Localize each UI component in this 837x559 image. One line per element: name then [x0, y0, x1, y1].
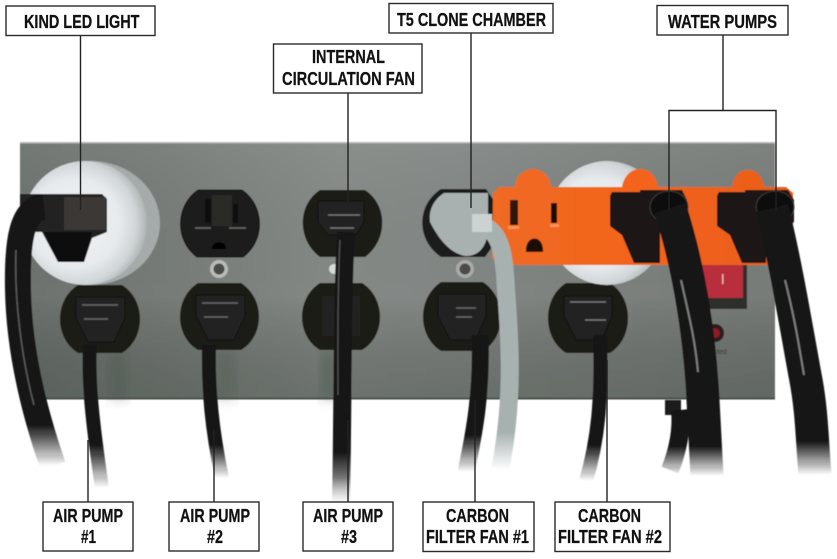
icon: LED light plug [20, 194, 107, 262]
label: INTERNAL CIRCULATION FAN: CIRCULATION FAN [282, 69, 415, 89]
label: T5 CLONE CHAMBER [389, 4, 553, 33]
label: WATER PUMPS [657, 6, 788, 35]
cable: grey T5 clone chamber [472, 223, 510, 470]
leader lines [80, 33, 776, 502]
cable: secondary cord behind water pump [665, 400, 681, 470]
cable: LED light [16, 207, 53, 466]
icon: T5 outlet and grey plug [422, 189, 497, 257]
cable: carbon filter fan 2 [586, 335, 600, 481]
label: INTERNAL CIRCULATION FAN [274, 44, 422, 93]
label: AIR PUMP #2: AIR PUMP [180, 506, 250, 526]
label: KIND LED LIGHT [6, 6, 155, 36]
label: AIR PUMP #2 [169, 502, 259, 551]
label: AIR PUMP #2: #2 [207, 527, 223, 547]
icon: right white round receptacle [547, 161, 667, 285]
icon: open outlet top row [181, 190, 259, 257]
label: AIR PUMP #1: #1 [81, 527, 96, 547]
panel: grey metal faceplate [20, 142, 775, 400]
cable: water pump 2 [772, 208, 815, 475]
photo: power panel with outlets and cables [16, 142, 815, 504]
label: INTERNAL CIRCULATION FAN: INTERNAL [312, 47, 385, 67]
label: WATER PUMPS: WATER PUMPS [668, 12, 777, 32]
icon: left white round receptacle [22, 161, 160, 285]
icon: screws between outlets [210, 260, 474, 278]
icon: indicator light with label [697, 324, 727, 356]
label: CARBON FILTER FAN #1: CARBON [446, 506, 509, 526]
label: AIR PUMP #3: #3 [341, 527, 357, 547]
label: CARBON FILTER FAN #2 [555, 502, 670, 552]
label: AIR PUMP #1: AIR PUMP [53, 506, 123, 526]
icon: red rocker switch [693, 262, 747, 309]
label: CARBON FILTER FAN #2: FILTER FAN #2 [558, 527, 662, 547]
cable: carbon filter fan 1 [466, 335, 480, 472]
label: CARBON FILTER FAN #2: CARBON [578, 506, 641, 526]
cable: air pump 1 [90, 345, 102, 488]
cable: internal circulation fan and air pump 3 [338, 232, 346, 504]
icon: plugged outlets [60, 190, 628, 353]
cable: water pump 1 [670, 208, 707, 476]
label: AIR PUMP #3 [303, 502, 393, 551]
icon: water pump plugs [610, 190, 794, 263]
label: T5 CLONE CHAMBER: T5 CLONE CHAMBER [397, 10, 546, 30]
label: KIND LED LIGHT: KIND LED LIGHT [24, 12, 140, 32]
label: AIR PUMP #3: AIR PUMP [313, 506, 383, 526]
icon: indicator light with label: Protected [697, 349, 727, 356]
label: CARBON FILTER FAN #1: FILTER FAN #1 [426, 527, 529, 547]
label: AIR PUMP #1 [43, 502, 133, 551]
cable: air pump 2 [209, 345, 222, 478]
label: CARBON FILTER FAN #1 [423, 502, 534, 552]
icon: orange triple-outlet adapter [492, 169, 793, 265]
